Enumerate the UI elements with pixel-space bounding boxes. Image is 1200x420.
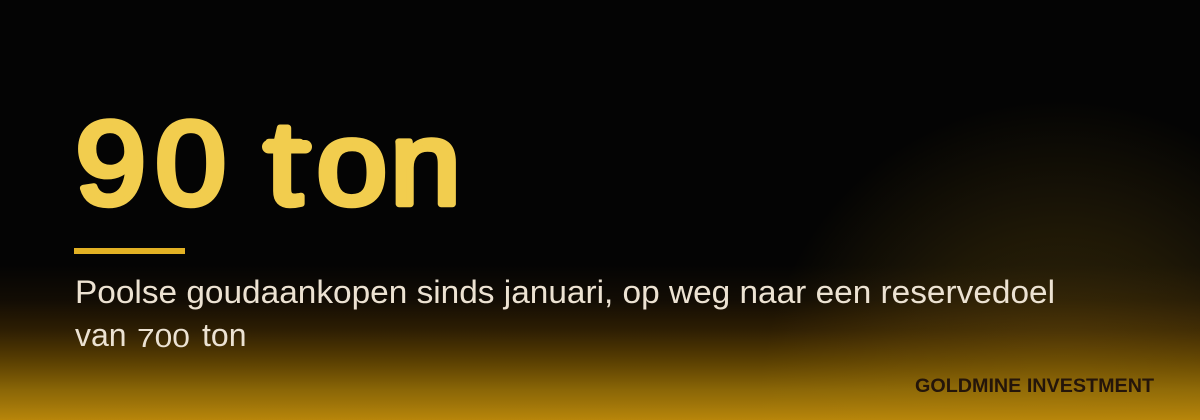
subtitle text — [75, 274, 1055, 353]
brand label: GOLDMINE INVESTMENT — [915, 375, 1154, 397]
subtitle text: Poolse goudaankopen sinds januari, op weg naar een reservedoel — [75, 274, 1055, 310]
subtitle text: 700 — [137, 325, 190, 353]
subtitle text: van — [75, 317, 127, 353]
subtitle text: ton — [202, 317, 246, 353]
headline: 90 ton: 90 ton — [76, 97, 461, 229]
accent rule — [74, 248, 185, 254]
